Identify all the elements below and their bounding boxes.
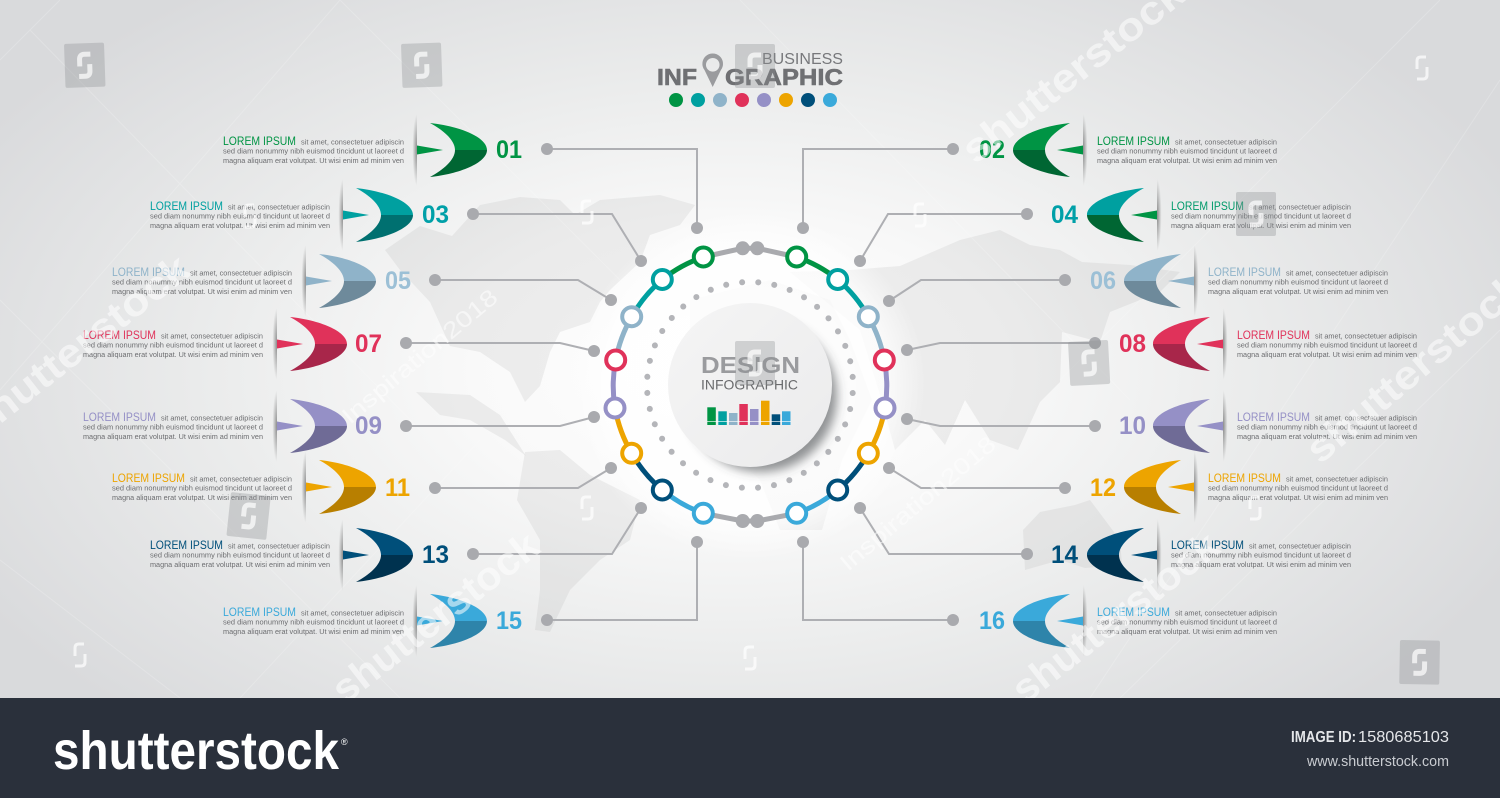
ring nodes: [606, 248, 894, 523]
watermark outlines: [75, 57, 1427, 669]
text 05: sit amet, consectetuer adipiscin: [190, 268, 292, 278]
text 16: magna aliquam erat volutpat. Ut wisi enim ad minim ven: [1097, 627, 1277, 636]
step 03: [150, 179, 647, 267]
number 06: 06: [1090, 267, 1116, 295]
mini bar chart: [707, 401, 791, 425]
text 10: [1237, 412, 1417, 441]
text 10: magna aliquam erat volutpat. Ut wisi enim ad minim ven: [1237, 432, 1417, 441]
connector 15: [541, 536, 703, 626]
number 10: 10: [1119, 412, 1146, 440]
text 13: [150, 540, 330, 569]
text 07: sed diam nonummy nibh euismod tincidunt ut laoreet d: [83, 340, 263, 350]
text 06: sit amet, consectetuer adipiscin: [1286, 268, 1388, 278]
step 14: [854, 502, 1351, 591]
step 01: [223, 114, 703, 234]
text 05: magna aliquam erat volutpat. Ut wisi enim ad minim ven: [112, 287, 292, 296]
step 15: [223, 536, 703, 657]
text 15: magna aliquam erat volutpat. Ut wisi enim ad minim ven: [223, 627, 404, 636]
text 07: sit amet, consectetuer adipiscin: [161, 332, 263, 340]
text 06: magna aliquam erat volutpat. Ut wisi enim ad minim ven: [1208, 287, 1388, 296]
text 02: LOREM IPSUM: [1097, 136, 1170, 148]
title: business: BUSINESS: [762, 51, 843, 68]
step 07: [83, 308, 600, 380]
text 02: sit amet, consectetuer adipiscin: [1175, 138, 1277, 146]
text 15: [223, 607, 404, 636]
connector 01: [541, 143, 703, 234]
centre glow: [575, 210, 925, 560]
arrow 06: [1124, 245, 1203, 317]
text 07: LOREM IPSUM: [83, 330, 156, 342]
text 13: sit amet, consectetuer adipiscin: [228, 542, 330, 550]
text 11: magna aliquam erat volutpat. Ut wisi enim ad minim ven: [112, 493, 292, 502]
text 16: sed diam nonummy nibh euismod tincidunt ut laoreet d: [1097, 618, 1277, 626]
number 01: 01: [496, 136, 522, 164]
text 05: LOREM IPSUM: [112, 267, 185, 279]
image id number: 1580685103: [1358, 729, 1449, 746]
ring segments: [613, 248, 887, 521]
title: graphic: GRAPHIC: [725, 64, 843, 90]
text 03: sed diam nonummy nibh euismod tincidunt ut laoreet d: [150, 212, 330, 220]
footer bar: [0, 698, 1500, 798]
arrow 02: [1013, 114, 1092, 186]
text 09: sit amet, consectetuer adipiscin: [161, 414, 263, 422]
number 15: 15: [496, 607, 522, 635]
number 09: 09: [355, 412, 382, 440]
text 03: [150, 201, 330, 230]
text 13: sed diam nonummy nibh euismod tincidunt ut laoreet d: [150, 550, 330, 560]
text 04: LOREM IPSUM: [1171, 201, 1244, 213]
step 13: [150, 502, 647, 591]
text 11: sit amet, consectetuer adipiscin: [190, 474, 292, 484]
arrow 03: [334, 179, 413, 251]
text 09: sed diam nonummy nibh euismod tincidunt ut laoreet d: [83, 422, 263, 432]
footer logo: shutterstock: [53, 721, 340, 781]
text 16: [1097, 607, 1277, 636]
grey ring dots: [736, 241, 764, 528]
arrow 10: [1153, 390, 1232, 462]
text 01: sit amet, consectetuer adipiscin: [301, 138, 404, 146]
text 14: magna aliquam erat volutpat. Ut wisi enim ad minim ven: [1171, 560, 1351, 569]
text 14: LOREM IPSUM: [1171, 540, 1244, 552]
connector 06: [883, 274, 1071, 307]
watermark text: shutterstock: [323, 523, 548, 712]
text 05: sed diam nonummy nibh euismod tincidunt ut laoreet d: [112, 278, 292, 286]
step 12: [883, 451, 1388, 523]
connector 08: [901, 337, 1101, 356]
text 11: sed diam nonummy nibh euismod tincidunt ut laoreet d: [112, 484, 292, 492]
text 12: [1208, 473, 1388, 502]
number 13: 13: [422, 541, 449, 569]
text 11: LOREM IPSUM: [112, 473, 185, 485]
text 12: LOREM IPSUM: [1208, 473, 1281, 485]
arrow 04: [1087, 179, 1166, 251]
dotted circle: [639, 274, 861, 496]
arrow 07: [268, 308, 347, 380]
text 02: magna aliquam erat volutpat. Ut wisi enim ad minim ven: [1097, 156, 1277, 165]
number 04: 04: [1051, 201, 1078, 229]
text 06: LOREM IPSUM: [1208, 267, 1281, 279]
arrow 12: [1124, 451, 1203, 523]
disc: [668, 303, 832, 467]
text 14: [1171, 540, 1351, 569]
text 02: sed diam nonummy nibh euismod tincidunt ut laoreet d: [1097, 146, 1277, 156]
number 03: 03: [422, 201, 449, 229]
step 11: [112, 451, 617, 523]
step 08: [901, 308, 1417, 380]
connector 10: [901, 413, 1101, 432]
text 01: [223, 136, 404, 165]
text 09: [83, 412, 263, 441]
registered mark: ®: [341, 737, 348, 747]
text 03: magna aliquam erat volutpat. Ut wisi enim ad minim ven: [150, 221, 330, 230]
text 15: sit amet, consectetuer adipiscin: [301, 608, 404, 618]
colour dots: [669, 93, 837, 107]
watermark text: shutterstock: [1003, 523, 1228, 712]
text 08: sit amet, consectetuer adipiscin: [1315, 332, 1417, 340]
text 12: sit amet, consectetuer adipiscin: [1286, 474, 1388, 484]
number 11: 11: [385, 474, 410, 502]
text 07: magna aliquam erat volutpat. Ut wisi enim ad minim ven: [83, 350, 263, 359]
text 16: sit amet, consectetuer adipiscin: [1175, 608, 1277, 618]
text 14: sed diam nonummy nibh euismod tincidunt ut laoreet d: [1171, 550, 1351, 560]
title: inf: INF: [657, 64, 697, 90]
text 09: magna aliquam erat volutpat. Ut wisi enim ad minim ven: [83, 432, 263, 441]
step 16: [797, 536, 1277, 657]
arrow 08: [1153, 308, 1232, 380]
text 10: sit amet, consectetuer adipiscin: [1315, 414, 1417, 422]
text 08: sed diam nonummy nibh euismod tincidunt ut laoreet d: [1237, 340, 1417, 350]
text 09: LOREM IPSUM: [83, 412, 156, 424]
website: www.shutterstock.com: [1306, 753, 1449, 770]
arrow 15: [408, 585, 487, 657]
text 16: LOREM IPSUM: [1097, 607, 1170, 619]
arrow 05: [297, 245, 376, 317]
disc subheading: INFOGRAPHIC: [701, 376, 798, 392]
disc shadow: [685, 320, 837, 472]
watermark squares: [64, 43, 1440, 685]
text 15: LOREM IPSUM: [223, 607, 296, 619]
connector 03: [467, 208, 647, 267]
text 13: LOREM IPSUM: [150, 540, 223, 552]
text 11: [112, 473, 292, 502]
world map: [385, 195, 1180, 632]
step 05: [112, 245, 617, 317]
number 08: 08: [1119, 330, 1146, 358]
text 04: [1171, 201, 1351, 230]
text 03: sit amet, consectetuer adipiscin: [228, 202, 330, 212]
text 15: sed diam nonummy nibh euismod tincidunt ut laoreet d: [223, 618, 404, 626]
arrow 11: [297, 451, 376, 523]
text 01: magna aliquam erat volutpat. Ut wisi enim ad minim ven: [223, 156, 404, 165]
step 09: [83, 390, 600, 462]
connector 09: [400, 411, 600, 432]
connector 11: [429, 462, 617, 494]
text 08: magna aliquam erat volutpat. Ut wisi enim ad minim ven: [1237, 350, 1417, 359]
text 12: magna aliquam erat volutpat. Ut wisi enim ad minim ven: [1208, 493, 1388, 502]
number 16: 16: [979, 607, 1005, 635]
number 05: 05: [385, 267, 411, 295]
arrow 09: [268, 390, 347, 462]
connector 13: [467, 502, 647, 560]
text 08: LOREM IPSUM: [1237, 330, 1310, 342]
number 14: 14: [1051, 541, 1078, 569]
watermark text: Inspiration2018: [835, 431, 1001, 576]
step 10: [901, 390, 1417, 462]
step 06: [883, 245, 1388, 317]
watermark text: Inspiration2018: [337, 284, 503, 429]
title: [657, 51, 843, 107]
text 06: [1208, 267, 1388, 296]
connector 02: [797, 143, 959, 234]
disc heading: DESIGN: [701, 352, 800, 378]
central disc: [668, 303, 837, 472]
connector 12: [883, 462, 1071, 494]
connector 14: [854, 502, 1033, 560]
text 06: sed diam nonummy nibh euismod tincidunt ut laoreet d: [1208, 278, 1388, 286]
text 04: sed diam nonummy nibh euismod tincidunt ut laoreet d: [1171, 212, 1351, 220]
text 01: LOREM IPSUM: [223, 136, 296, 148]
text 04: magna aliquam erat volutpat. Ut wisi enim ad minim ven: [1171, 221, 1351, 230]
ring: [606, 241, 894, 528]
arrow 14: [1087, 519, 1166, 591]
text 10: sed diam nonummy nibh euismod tincidunt ut laoreet d: [1237, 422, 1417, 432]
text 04: sit amet, consectetuer adipiscin: [1249, 202, 1351, 212]
arrow 01: [408, 114, 487, 186]
text 13: magna aliquam erat volutpat. Ut wisi enim ad minim ven: [150, 560, 330, 569]
connector 04: [854, 208, 1033, 267]
arrow 13: [334, 519, 413, 591]
icon: map pin: [702, 53, 723, 87]
number 12: 12: [1090, 474, 1116, 502]
text 12: sed diam nonummy nibh euismod tincidunt ut laoreet d: [1208, 484, 1388, 492]
arrow 16: [1013, 585, 1092, 657]
text 01: sed diam nonummy nibh euismod tincidunt ut laoreet d: [223, 146, 404, 156]
text 03: LOREM IPSUM: [150, 201, 223, 213]
text 05: [112, 267, 292, 296]
number 02: 02: [979, 136, 1005, 164]
text 02: [1097, 136, 1277, 165]
text 10: LOREM IPSUM: [1237, 412, 1310, 424]
number 07: 07: [355, 330, 382, 358]
text 08: [1237, 330, 1417, 359]
text 14: sit amet, consectetuer adipiscin: [1249, 542, 1351, 550]
image id label: IMAGE ID:: [1291, 729, 1356, 746]
connector 05: [429, 274, 617, 306]
connector 07: [400, 337, 600, 357]
step 02: [797, 114, 1277, 234]
connector 16: [797, 536, 959, 626]
text 07: [83, 330, 263, 359]
step 04: [854, 179, 1351, 267]
